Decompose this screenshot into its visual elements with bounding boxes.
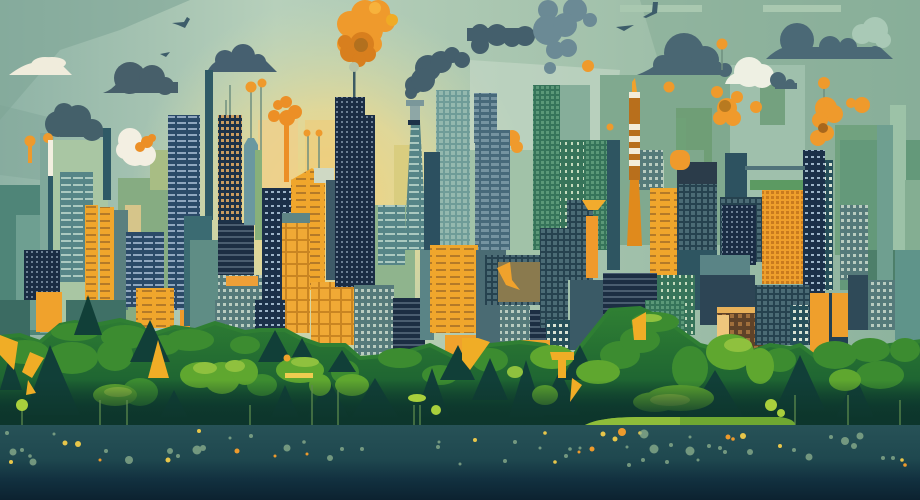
cloud: pale steam left <box>116 128 156 166</box>
forest: mid green tree blobs <box>1 312 920 406</box>
forest: pines <box>0 295 875 422</box>
tall dark tower <box>335 97 375 287</box>
cloud: top-left pale <box>9 57 72 75</box>
smokestack orange plume over tall tower <box>337 0 398 98</box>
cloud: chimney smoke centre-left <box>207 44 277 72</box>
forest: bright foreground trees <box>93 334 861 412</box>
low buildings behind forest <box>0 300 685 380</box>
cloud: dark centre right <box>637 33 797 89</box>
water reflections: pale green dots <box>5 430 895 467</box>
cloud: dark top right <box>766 23 893 59</box>
distant pale city layer <box>0 65 920 340</box>
cloud: white centre right <box>725 57 774 88</box>
water reflections: yellow and orange dots <box>9 428 907 467</box>
orange towers centre <box>282 168 354 345</box>
grass mound <box>585 417 795 425</box>
yellow windows in the forest <box>284 354 313 378</box>
cloud: dark left <box>103 62 178 95</box>
centre-left navy towers <box>218 115 292 330</box>
small lime saplings <box>16 385 900 425</box>
left side buildings <box>24 115 218 332</box>
cloud: pale top right <box>852 17 891 48</box>
yellow trees <box>0 312 646 402</box>
back tall towers <box>60 85 898 290</box>
orange plume right stack <box>810 97 843 146</box>
tapered teal tower <box>404 100 427 250</box>
orange balloons and lamp poles <box>24 38 870 190</box>
striped smokestack <box>627 78 642 246</box>
water <box>0 425 920 500</box>
right-centre navy and orange buildings <box>603 150 920 365</box>
forest: canopy silhouette <box>0 308 920 440</box>
forest floor shadow <box>0 380 920 426</box>
smoke plume: grey-blue drifting plume <box>405 0 597 99</box>
orange tree-like smoke near centre left <box>135 96 302 182</box>
birds <box>160 2 658 57</box>
main chimney left (dark) <box>48 70 213 326</box>
orange plume mid right <box>713 91 743 126</box>
centre buildings <box>354 152 606 370</box>
orange plume on central stack <box>502 130 523 153</box>
forest: lime highlights <box>104 314 752 406</box>
cloud: left chimney smoke <box>45 103 110 141</box>
